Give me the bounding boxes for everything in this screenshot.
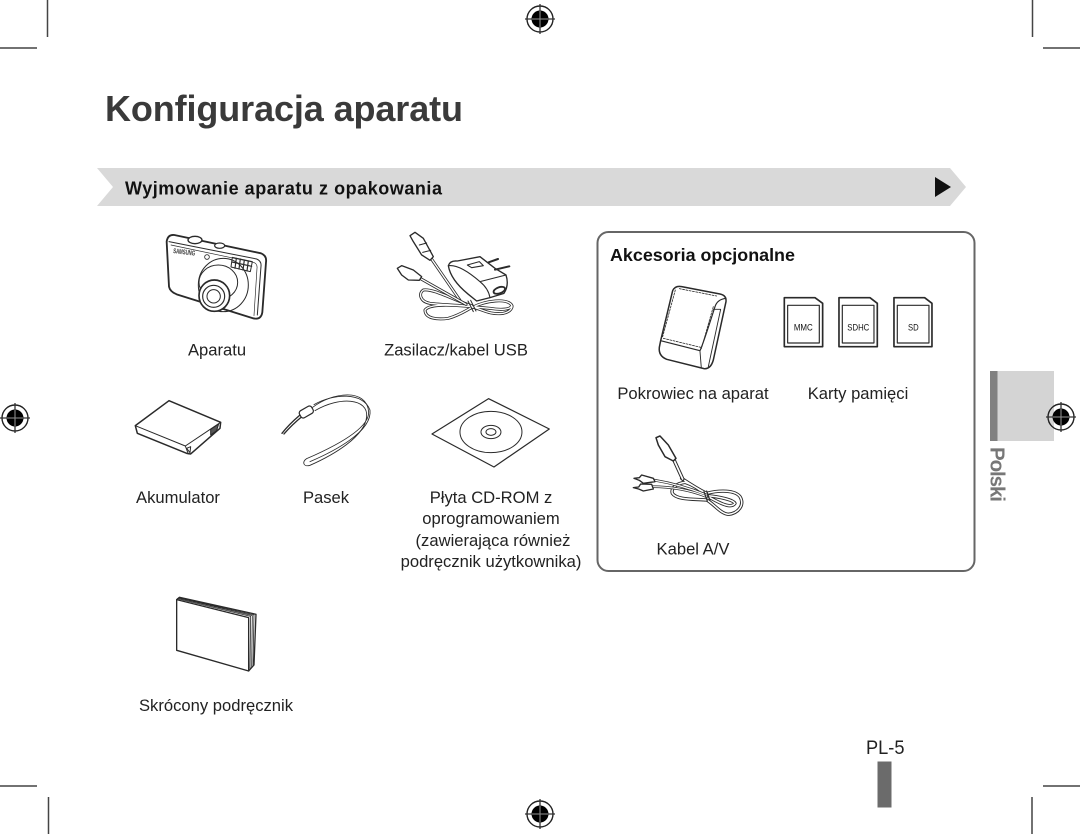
page marker bar (878, 762, 892, 808)
icon: SD card (894, 298, 932, 347)
label: CD-ROM: oprogramowaniem (422, 509, 560, 528)
label: cards: Karty pamięci (808, 384, 908, 403)
registration mark: right (1046, 402, 1076, 432)
label: CD-ROM: Płyta CD-ROM z (430, 488, 552, 507)
camera brand label: SAMSUNG (173, 248, 195, 258)
section heading bar (97, 168, 966, 206)
icon: camera case (659, 286, 726, 369)
side tab (990, 371, 1054, 441)
icon: quick guide booklet (177, 597, 256, 671)
label: CD-ROM: (zawierająca również (416, 531, 570, 550)
icon: A/V cable (633, 436, 742, 514)
registration mark: top (525, 4, 555, 34)
card text: MMC (794, 322, 813, 332)
icon: next arrow (935, 177, 951, 197)
label: CD-ROM: podręcznik użytkownika) (401, 552, 581, 571)
icon: camera (167, 235, 266, 319)
label: A/V cable: Kabel A/V (657, 540, 729, 558)
label: strap: Pasek (303, 488, 350, 507)
icon: MMC card (784, 298, 823, 347)
registration mark: left (0, 403, 30, 433)
section heading text: Wyjmowanie aparatu z opakowania (125, 178, 443, 198)
card text: SD (908, 322, 919, 332)
label: charger: Zasilacz/kabel USB (384, 340, 528, 360)
title: Konfiguracja aparatu (105, 88, 463, 129)
label: case: Pokrowiec na aparat (617, 384, 769, 403)
icon: SDHC card (839, 298, 877, 347)
label: battery: Akumulator (136, 488, 220, 507)
panel: optional accessories (598, 232, 974, 571)
registration mark: bottom (525, 799, 555, 829)
panel heading: Akcesoria opcjonalne (610, 245, 795, 265)
page number: PL-5 (866, 737, 905, 759)
label: camera: Aparatu (188, 340, 246, 360)
language label: Polski (986, 447, 1008, 502)
icon: USB charger and cable (397, 232, 512, 319)
icon: CD-ROM (432, 399, 549, 467)
label: quick guide: Skrócony podręcznik (139, 696, 294, 715)
icon: battery (135, 401, 221, 454)
icon: wrist strap (282, 395, 370, 466)
card text: SDHC (847, 322, 870, 332)
